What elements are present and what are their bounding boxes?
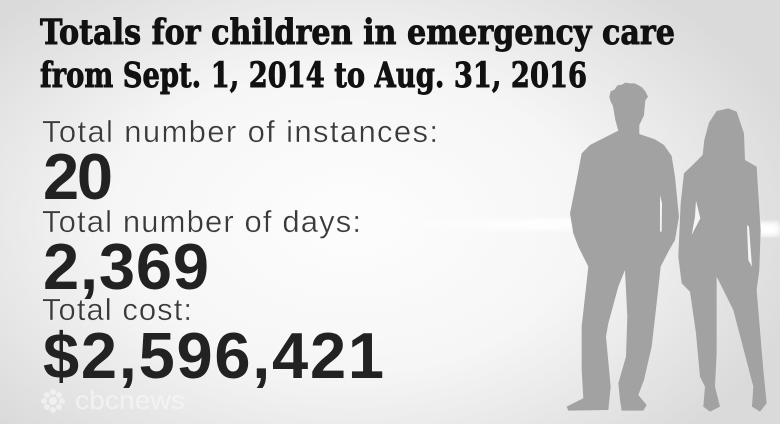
statistic: cost: Total cost: xyxy=(42,292,192,327)
arm gap xyxy=(660,195,662,232)
statistic: instances: Total number of instances: xyxy=(42,114,438,149)
silhouette: woman xyxy=(678,108,767,412)
statistic: days xyxy=(42,204,361,303)
title: Totals for children in emergency care xyxy=(40,12,675,53)
arm gap right xyxy=(747,225,752,267)
statistic: days: 2,369 xyxy=(43,230,209,303)
statistic: days: Total number of days: xyxy=(42,204,361,239)
silhouette: man xyxy=(567,83,679,411)
title xyxy=(40,12,675,96)
statistic: instances: 20 xyxy=(43,140,113,213)
logo: CBC News watermark: cbcnews xyxy=(75,385,185,415)
statistic: cost: $2,596,421 xyxy=(43,319,384,392)
statistic: instances xyxy=(42,114,438,213)
arm gap left xyxy=(692,201,700,235)
title: from Sept. 1, 2014 to Aug. 31, 2016 xyxy=(40,55,587,96)
